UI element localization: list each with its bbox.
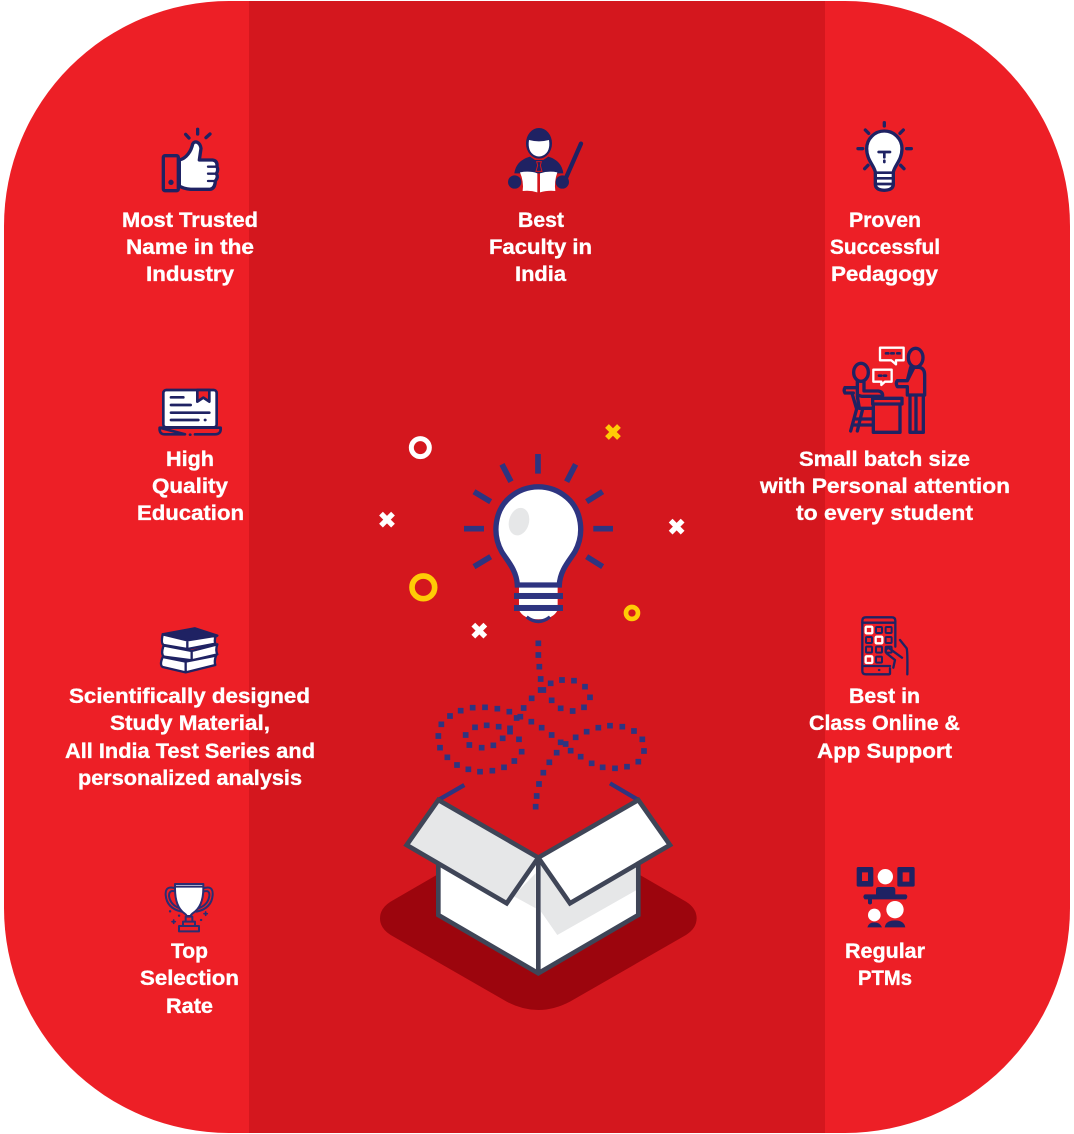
heading: best in class online and app support: App Support: [817, 739, 952, 763]
heading: most trusted name in the industry: Name in the: [126, 235, 254, 259]
panel: proven pedagogy: [830, 123, 940, 286]
icon: stack of books: [161, 628, 217, 672]
panel: online and app support: [809, 617, 960, 763]
heading: proven successful pedagogy: Pedagogy: [831, 262, 938, 286]
illustration: open box with ribbon: [380, 643, 697, 1010]
icon: laptop with bookmark: [160, 390, 221, 435]
icon: teacher with book and pointer: [508, 128, 581, 192]
heading: proven successful pedagogy: [830, 208, 940, 286]
heading: scientifically designed study material: All India Test Series and: [65, 739, 315, 763]
icon: student and teacher at desk: [844, 348, 925, 432]
heading: regular ptms: Regular: [845, 939, 926, 963]
heading: best faculty in india: Best: [518, 208, 564, 232]
heading: best faculty in india: [489, 208, 592, 286]
heading: top selection rate: Rate: [166, 994, 213, 1018]
heading: small batch size with personal attention: [759, 447, 1010, 525]
heading: proven successful pedagogy: Successful: [830, 235, 940, 259]
illustration: light bulb with sparkles: [381, 426, 683, 637]
icon: trophy: [166, 884, 213, 931]
heading: best faculty in india: India: [515, 262, 567, 286]
panel: study material: [65, 628, 315, 790]
panel: most trusted name: [122, 129, 258, 286]
heading: high quality education: Quality: [152, 474, 228, 498]
heading: best in class online and app support: Class Online &: [809, 711, 960, 735]
heading: small batch size with personal attention: with Personal attention: [759, 474, 1010, 498]
icon: dotted ribbon: [438, 643, 644, 807]
panel: high quality education: [137, 390, 244, 525]
icon: phone with app grid and hand: [862, 617, 907, 674]
box shadow: [380, 875, 697, 1010]
heading: top selection rate: Top: [171, 939, 208, 963]
heading: most trusted name in the industry: [122, 208, 258, 286]
panel: best faculty: [489, 128, 592, 286]
panel: regular ptms: [845, 867, 926, 990]
icon: small light bulb: [858, 123, 911, 190]
icon: thumbs up: [163, 129, 218, 191]
icon: crosses: [381, 426, 683, 637]
heading: most trusted name in the industry: Industry: [146, 262, 234, 286]
panel: top selection rate: [140, 884, 239, 1018]
heading: scientifically designed study material: Study Material,: [110, 711, 270, 735]
heading: best faculty in india: Faculty in: [489, 235, 592, 259]
icon: parent teacher meeting: [857, 867, 915, 927]
heading: best in class online and app support: Best in: [849, 684, 920, 708]
heading: scientifically designed study material: Scientifically designed: [69, 684, 310, 708]
heading: scientifically designed study material: [65, 684, 315, 790]
heading: small batch size with personal attention: to every student: [796, 501, 973, 525]
panel: small batch size: [759, 348, 1010, 525]
icon: large light bulb: [496, 487, 581, 621]
heading: best in class online and app support: [809, 684, 960, 763]
heading: top selection rate: Selection: [140, 966, 239, 990]
heading: most trusted name in the industry: Most Trusted: [122, 208, 258, 232]
heading: regular ptms: PTMs: [858, 966, 912, 990]
icon: rings: [411, 439, 638, 619]
icon: bulb rays: [464, 454, 613, 567]
icon: open cardboard box: [407, 783, 670, 973]
heading: small batch size with personal attention: Small batch size: [799, 447, 970, 471]
heading: regular ptms: [845, 939, 926, 990]
heading: high quality education: Education: [137, 501, 244, 525]
heading: high quality education: High: [166, 447, 214, 471]
heading: proven successful pedagogy: Proven: [849, 208, 921, 232]
heading: top selection rate: [140, 939, 239, 1018]
heading: high quality education: [137, 447, 244, 525]
heading: scientifically designed study material: personalized analysis: [78, 766, 302, 790]
